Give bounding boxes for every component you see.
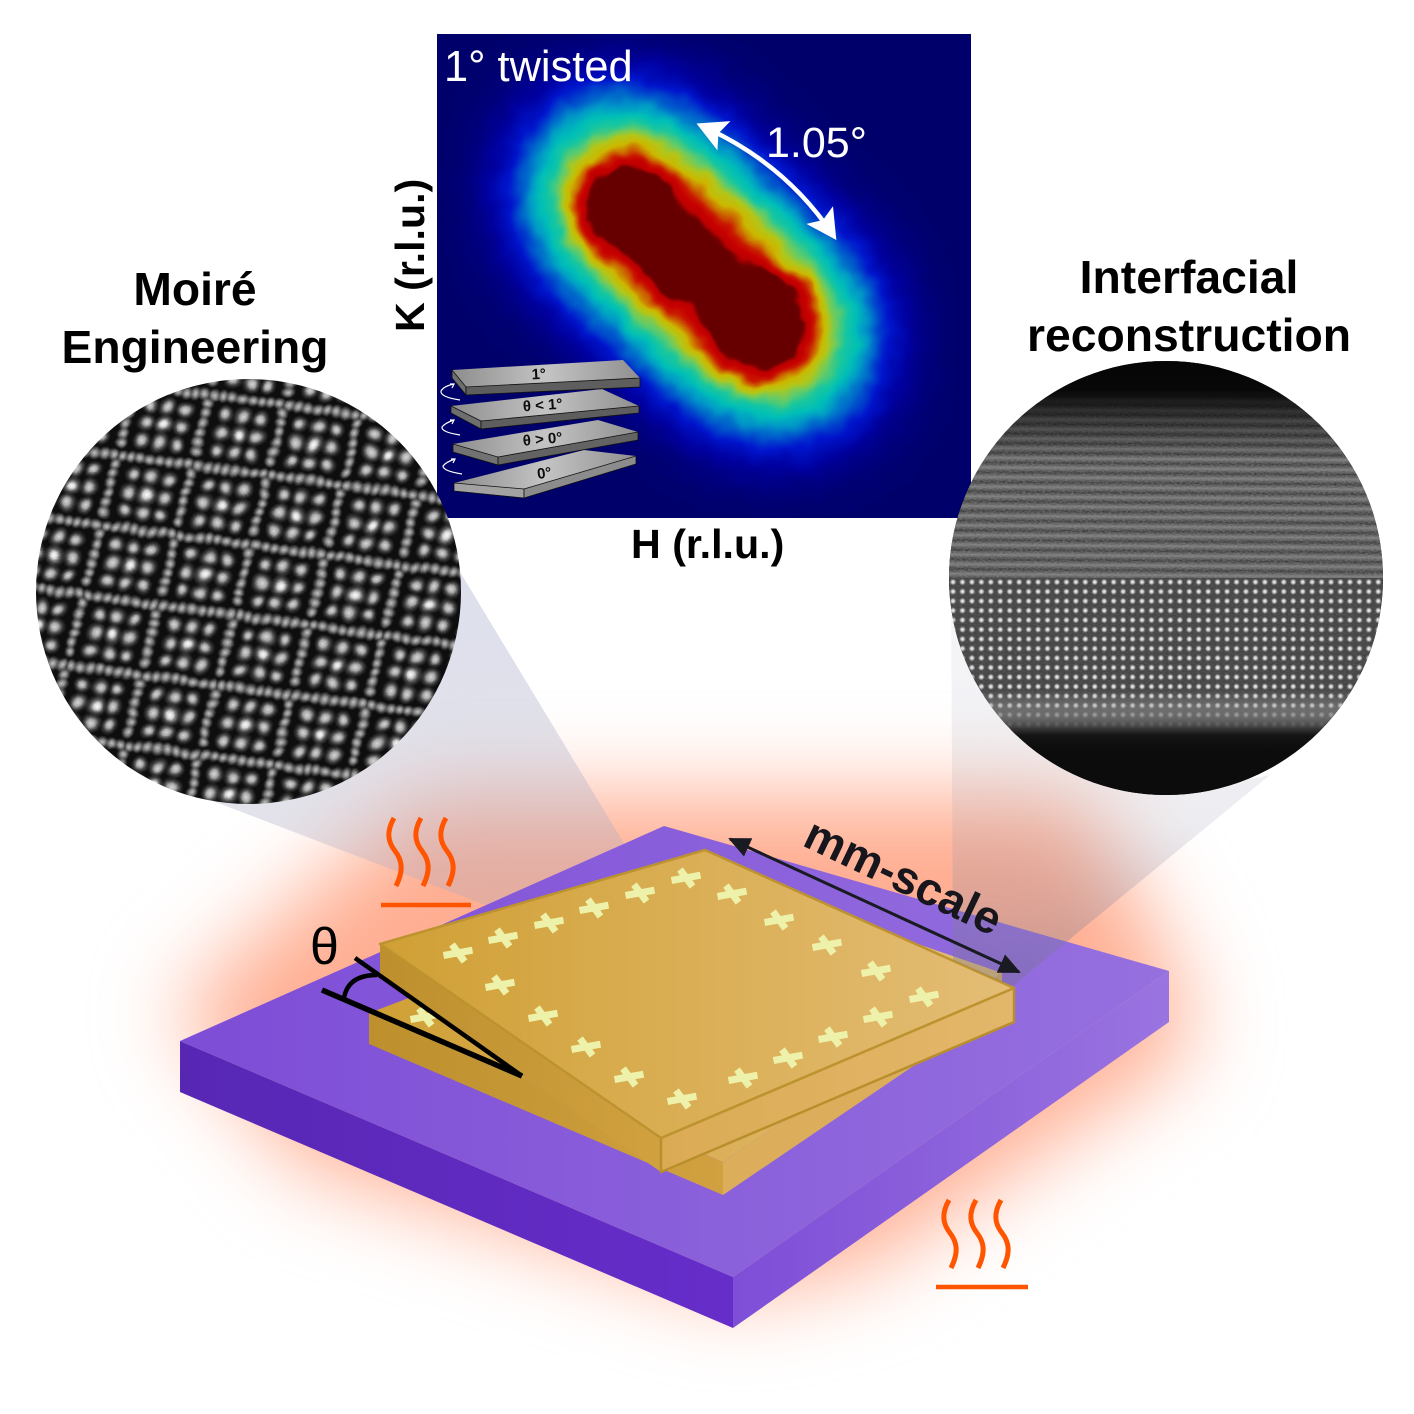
heat glow behind slab: [175, 795, 1190, 1295]
inset: twist stack: 0°: [536, 464, 553, 483]
heatmap intensity: [457, 34, 941, 502]
moiré micrograph circle: [36, 379, 461, 804]
heading: Interfacial reconstruction: Interfacial: [1080, 251, 1298, 303]
twist angle marker: [322, 958, 522, 1076]
diffraction heatmap panel: [437, 34, 971, 518]
axis label H: H (r.l.u.): [631, 521, 784, 567]
inset: twist stack: [441, 360, 640, 498]
heading: Moiré Engineering: Engineering: [62, 321, 328, 373]
mm-scale label: mm-scale: [797, 807, 1011, 945]
purple substrate slab: [180, 826, 1169, 1328]
lower gold crystal plate: [369, 880, 1002, 1195]
axis label K: K (r.l.u.): [387, 179, 433, 332]
projection cone: moiré: [205, 572, 670, 905]
upper gold crystal plate: [380, 850, 1014, 1172]
mm-scale arrow: [730, 839, 1019, 972]
panel title: 1° twisted: [444, 43, 633, 91]
heading: Interfacial reconstruction: reconstruction: [1027, 309, 1351, 361]
theta label: θ: [310, 918, 339, 976]
interfacial micrograph circle: [940, 355, 1390, 800]
heading: Moiré Engineering: Moiré: [133, 263, 257, 315]
heat icon bottom: [936, 1200, 1028, 1287]
inset: twist stack: θ > 0°: [522, 429, 563, 450]
heading: Interfacial reconstruction: [1027, 251, 1351, 361]
angle value: 1.05°: [766, 119, 867, 167]
inset: twist stack: 1°: [531, 366, 546, 383]
heat icon top: [381, 818, 471, 905]
angle arrow: [702, 126, 833, 235]
inset: twist stack: θ < 1°: [522, 396, 563, 415]
projection cone: interfacial: [951, 578, 1270, 986]
heading: Moiré Engineering: [62, 263, 328, 373]
alignment crosses: [444, 870, 938, 1108]
